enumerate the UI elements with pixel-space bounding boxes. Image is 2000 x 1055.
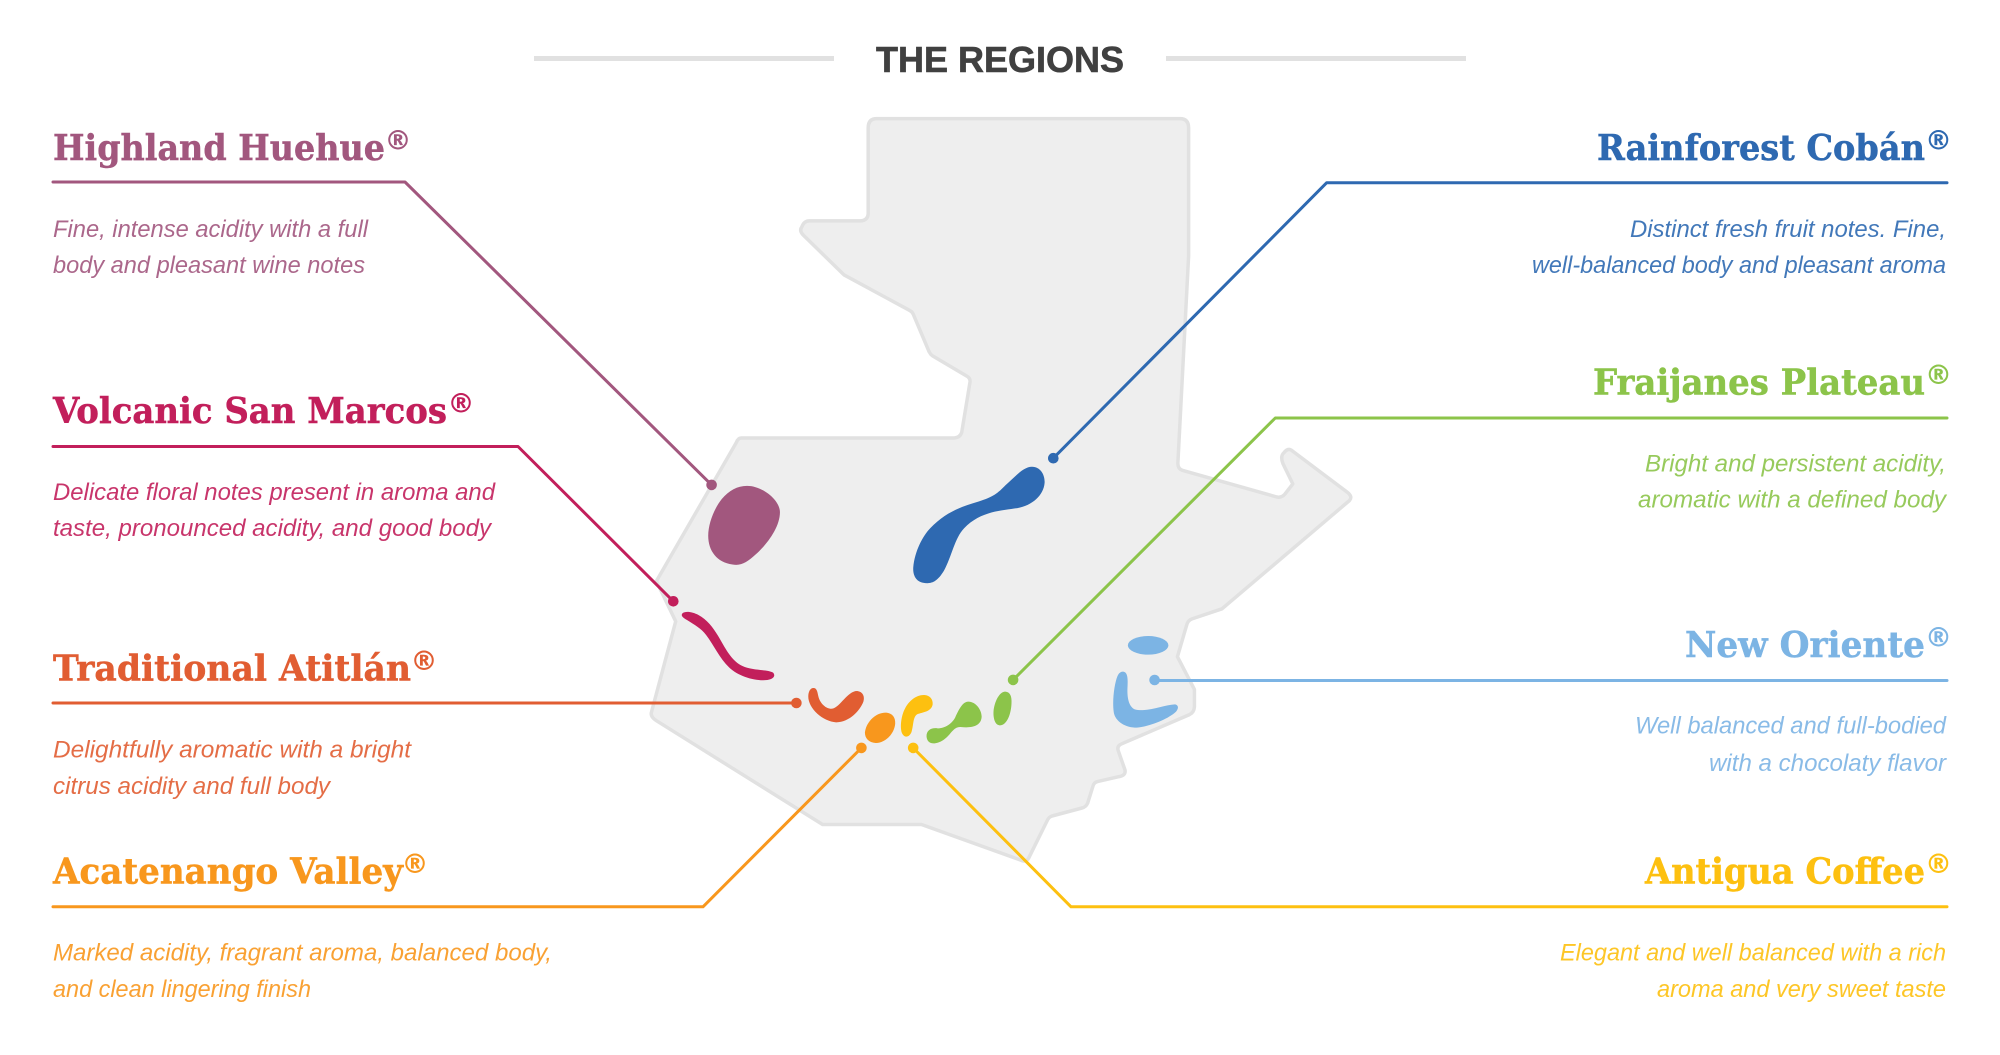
heading: ® — [384, 126, 412, 156]
heading: ® — [1925, 622, 1952, 654]
description: well-balanced body and pleasant aroma — [1532, 252, 1946, 279]
leader line — [908, 743, 1947, 907]
leader line — [1149, 675, 1947, 685]
heading: ® — [402, 849, 428, 880]
heading: Highland Huehue — [53, 128, 385, 169]
description — [53, 940, 552, 1003]
heading: Traditional Atitlán — [53, 648, 411, 690]
region shapes: southern chain — [682, 612, 1178, 743]
region shapes: large — [708, 467, 1045, 583]
heading: Volcanic San Marcos — [52, 391, 447, 432]
description: Fine, intense acidity with a full — [53, 216, 369, 243]
description: with a chocolaty flavor — [1709, 750, 1947, 777]
description: and clean lingering finish — [53, 976, 311, 1003]
region: Fraijanes Plateau — [927, 692, 1012, 743]
leader line — [53, 743, 867, 907]
region: Antigua Coffee — [901, 695, 933, 737]
description: Distinct fresh fruit notes. Fine, — [1630, 216, 1946, 243]
region: Highland Huehue — [708, 486, 780, 565]
region: New Oriente — [1113, 636, 1178, 728]
panel: Highland Huehue — [53, 126, 717, 490]
panel: Volcanic San Marcos — [52, 388, 679, 607]
description: aromatic with a defined body — [1638, 486, 1948, 514]
heading: Fraijanes Plateau — [1593, 362, 1925, 404]
heading: ® — [448, 388, 474, 420]
title: THE REGIONS — [534, 39, 1466, 80]
description: Bright and persistent acidity, — [1645, 450, 1946, 478]
leader line — [53, 182, 717, 490]
panel: Acatenango Valley — [52, 743, 867, 1003]
description — [1532, 216, 1946, 279]
description: Delicate floral notes present in aroma and — [53, 479, 496, 506]
description: aroma and very sweet taste — [1657, 976, 1946, 1003]
panel: Fraijanes Plateau — [1008, 360, 1952, 685]
description — [1560, 940, 1946, 1003]
description — [53, 736, 412, 800]
description: Delightfully aromatic with a bright — [53, 736, 412, 764]
leader line — [1048, 183, 1947, 464]
description — [1638, 450, 1948, 514]
leader line — [53, 446, 679, 607]
panel: New Oriente — [1149, 622, 1952, 777]
description: Marked acidity, fragrant aroma, balanced body, — [53, 940, 552, 966]
region: Rainforest Coban — [913, 467, 1045, 583]
heading: ® — [1925, 849, 1952, 880]
description: citrus acidity and full body — [53, 773, 332, 800]
heading: ® — [1925, 360, 1952, 391]
heading: New Oriente — [1685, 625, 1925, 666]
region: Traditional Atitlan — [808, 688, 864, 722]
description: Well balanced and full-bodied — [1635, 712, 1947, 740]
description — [53, 479, 496, 542]
description — [1635, 712, 1947, 777]
title: THE REGIONS: THE REGIONS — [876, 39, 1124, 80]
panel: Rainforest Coban — [1048, 126, 1952, 464]
description: body and pleasant wine notes — [53, 252, 365, 279]
description: Elegant and well balanced with a rich — [1560, 940, 1946, 966]
leader line — [1008, 418, 1947, 685]
description — [53, 216, 369, 279]
panel: Antigua Coffee — [908, 743, 1952, 1003]
panel: Traditional Atitlan — [53, 646, 802, 800]
heading: Antigua Coffee — [1644, 852, 1925, 892]
heading: Rainforest Cobán — [1597, 128, 1925, 169]
region: Volcanic San Marcos — [682, 612, 774, 680]
heading: ® — [410, 646, 438, 677]
leader line — [53, 698, 802, 708]
map of Guatemala — [651, 119, 1351, 861]
description: taste, pronounced acidity, and good body — [53, 515, 493, 542]
region: Acatenango Valley — [865, 713, 895, 743]
heading: ® — [1925, 126, 1952, 156]
heading: Acatenango Valley — [52, 852, 404, 892]
